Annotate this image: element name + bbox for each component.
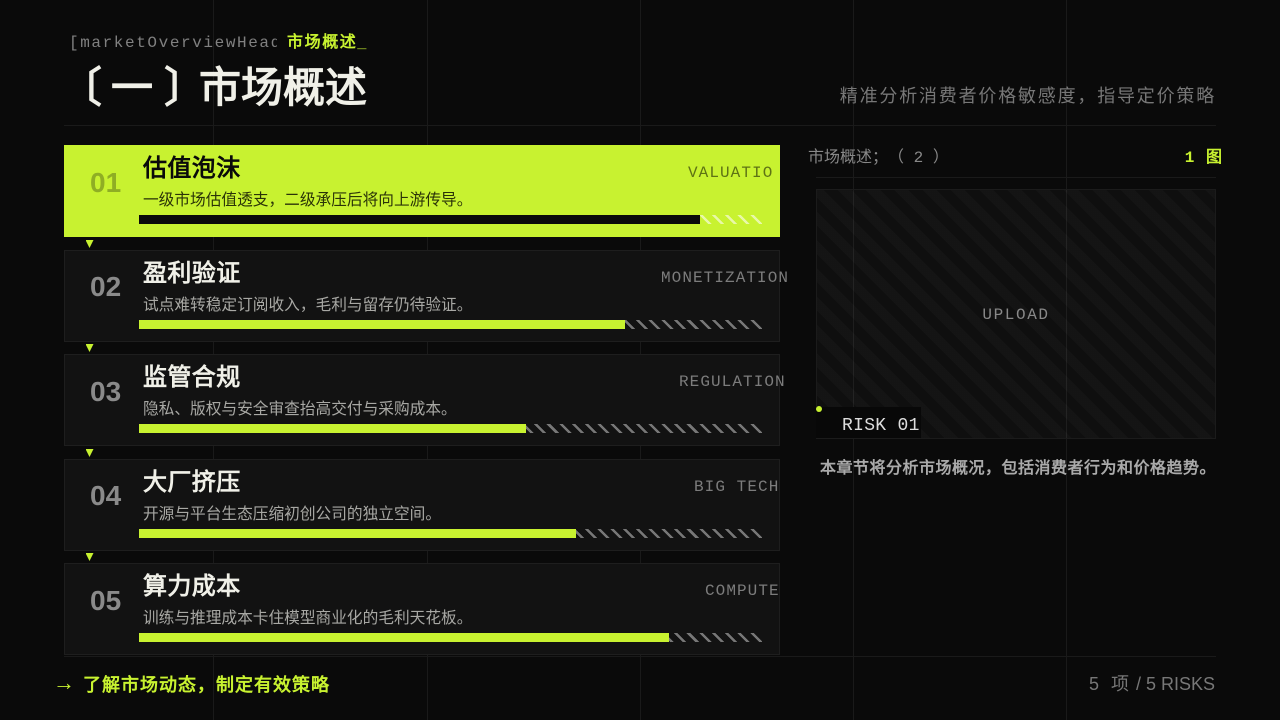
progress bar xyxy=(139,215,762,224)
arrow marker 4 xyxy=(86,553,94,561)
tag: BIG TECH xyxy=(694,478,779,496)
side panel caption: 本章节将分析市场概况，包括消费者行为和价格趋势。 xyxy=(820,460,1216,477)
risk label xyxy=(816,407,921,438)
tag: COMPUTE xyxy=(705,582,780,600)
card 03: regulation xyxy=(64,354,780,446)
card description: 隐私、版权与安全审查抬高交付与采购成本。 xyxy=(143,401,457,418)
number 03: 03 xyxy=(90,376,121,406)
card title: 算力成本 xyxy=(143,573,241,600)
card title: 大厂挤压 xyxy=(143,468,241,496)
header lime label: 市场概述_ xyxy=(287,34,368,51)
progress bar xyxy=(139,424,762,433)
card 01: valuation bubble xyxy=(64,145,780,237)
arrow marker 1 xyxy=(86,240,94,248)
card description: 训练与推理成本卡住模型商业化的毛利天花板。 xyxy=(143,610,472,627)
card title: 监管合规 xyxy=(143,364,241,391)
card title: 盈利验证 xyxy=(143,260,241,286)
risk label: RISK 01 xyxy=(842,416,920,436)
card 05: compute xyxy=(64,563,780,655)
progress bar xyxy=(139,528,762,538)
footer call to action: → xyxy=(53,670,75,695)
card description: 开源与平台生态压缩初创公司的独立空间。 xyxy=(143,506,441,522)
subtitle: 精准分析消费者价格敏感度，指导定价策略 xyxy=(840,86,1216,106)
card description: 一级市场估值透支，二级承压后将向上游传导。 xyxy=(143,192,472,209)
number 04: 04 xyxy=(90,480,121,511)
card 02: monetization xyxy=(64,250,780,342)
card description: 试点难转稳定订阅收入，毛利与留存仍待验证。 xyxy=(143,296,472,314)
arrow marker 2 xyxy=(86,344,94,352)
tag: REGULATION xyxy=(679,373,786,391)
arrow marker 3 xyxy=(86,449,94,457)
title: 〔一 〕市场概述 xyxy=(60,64,367,111)
footer count: 5 项 / 5 RISKS xyxy=(1089,674,1215,694)
card 04: big tech xyxy=(64,458,780,550)
side panel heading: 市场概述； （ 2 ） xyxy=(808,149,949,167)
side panel count: 1 图 xyxy=(1185,149,1223,167)
image placeholder xyxy=(816,189,1216,439)
number 05: 05 xyxy=(90,584,121,616)
upload label: UPLOAD xyxy=(982,306,1050,324)
card title: 估值泡沫 xyxy=(143,155,241,182)
footer call to action: 了解市场动态，制定有效策略 xyxy=(83,675,330,695)
tag: MONETIZATION xyxy=(661,268,789,286)
number 01: 01 xyxy=(90,166,121,198)
progress bar xyxy=(139,320,762,328)
number 02: 02 xyxy=(90,271,121,302)
progress bar xyxy=(139,633,762,642)
risk dot xyxy=(816,406,822,412)
